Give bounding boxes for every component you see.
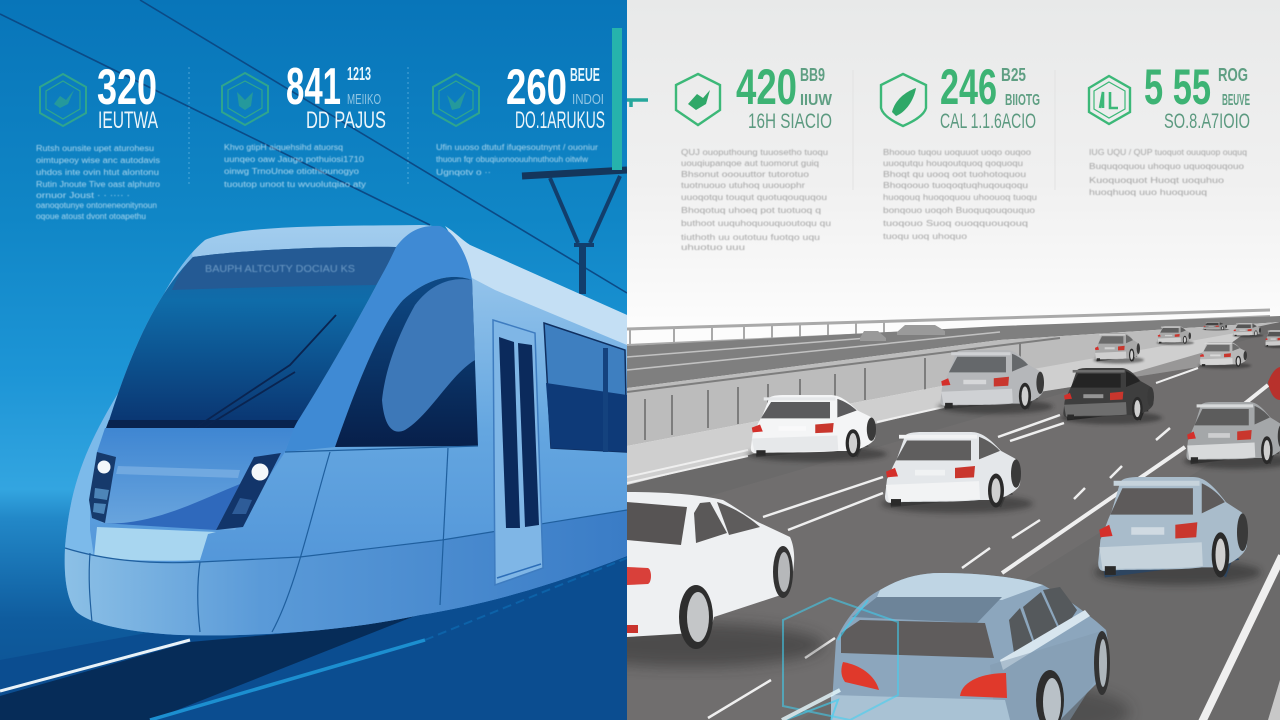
small label: BB9 <box>800 65 825 85</box>
number: 246 <box>940 59 997 115</box>
description: tuotnuouo utuhoq uuouophr <box>681 181 805 190</box>
bumper <box>94 527 216 561</box>
description: Ugnqotv o ·· <box>436 168 491 177</box>
body seams <box>65 446 627 632</box>
description: tiuthoth uu outotuu fuotqo uqu <box>681 233 820 242</box>
description: oinwg TrnoUnoe otiothiounogyo <box>224 167 360 176</box>
car: white hatchback <box>747 395 887 462</box>
description: Bhoqoouo tuoqoqtuqhuqouqoqu <box>883 181 1028 190</box>
divider <box>189 67 408 185</box>
catenary pole <box>522 170 627 294</box>
front swoosh <box>101 484 240 530</box>
description: Kuoquoquot Huoqt uoquhuo <box>1089 176 1225 185</box>
nose highlight <box>65 240 205 557</box>
label: CAL 1.1.6ACIO <box>940 110 1036 133</box>
description <box>224 143 366 189</box>
window reflection <box>382 279 475 432</box>
concrete shoulder <box>627 325 1280 485</box>
number: 5 55 <box>1144 59 1211 115</box>
icon: shield <box>881 74 926 126</box>
description: Buquqoquou uhoquo uquoqouqouo <box>1089 162 1245 171</box>
wall <box>627 322 1280 446</box>
car: big white sedan <box>555 492 825 667</box>
icon: hexagon badge <box>433 74 479 126</box>
description: Bhoqotuq uhoeq pot tuotuoq q <box>681 206 821 215</box>
panel: train side (left) <box>0 0 627 720</box>
destination band: BAUPH ALTCUTY DOCIAU KS <box>205 264 355 275</box>
description: tuoqouo Suoq ouoqquouqouq <box>883 219 1028 228</box>
description: oanoqotunye ontoneneonitynoun <box>36 201 157 210</box>
small label <box>1001 65 1040 109</box>
door <box>493 320 543 585</box>
distant cars <box>1093 322 1280 400</box>
description: Ufin uuoso dtutuf ifuqesoutnynt / ouoniur <box>436 143 598 152</box>
description <box>883 148 1037 241</box>
car: big foreground suv <box>831 573 1130 720</box>
right headlight <box>216 453 281 530</box>
small label <box>348 67 381 104</box>
label: DD PAJUS <box>306 107 386 134</box>
label: IEUTWA <box>98 107 158 134</box>
train body <box>65 225 627 635</box>
lower skirt <box>65 510 627 635</box>
A pillar <box>285 226 472 452</box>
description: uuoqotqu touqut quotuqouquqou <box>681 193 827 202</box>
number: 260 <box>506 59 567 115</box>
lane markings <box>627 368 1280 720</box>
overpass cars <box>860 325 945 341</box>
left headlight <box>89 452 116 523</box>
description: Khvo gtipH aiquehsihd atuorsq <box>224 143 343 152</box>
divider <box>853 70 1055 190</box>
description: IUG UQU / QUP tuoquot ouuquop ouquq <box>1089 148 1247 157</box>
car: light blue sedan <box>1094 477 1261 585</box>
icon: hexagon badge <box>40 74 86 126</box>
car: gray far right <box>1184 402 1280 469</box>
description <box>436 143 598 177</box>
overpass bridge <box>627 310 1280 485</box>
description: Bhoqt qu uooq oot tuohotoquou <box>883 170 1026 179</box>
description: huoqhuoq uuo huoquouq <box>1089 188 1207 197</box>
side window <box>335 277 478 447</box>
label: 16H SIACIO <box>748 110 832 133</box>
label: DO.1ARUKUS <box>515 107 605 134</box>
description: uouqiupanqoe aut tuomorut guiq <box>681 159 819 168</box>
stat: 841 <box>222 58 386 189</box>
icon: hexagon <box>1089 76 1130 124</box>
description <box>681 148 831 252</box>
car: gray suv <box>937 350 1053 414</box>
description: tuoutop unoot tu wvuolutqiao aty <box>224 180 366 189</box>
description: tuoqu uoq uhoquo <box>883 232 968 241</box>
stat: 5 55 <box>1089 59 1250 197</box>
description: ornuor Joust · · ···· · <box>36 191 130 200</box>
front panel <box>90 428 294 530</box>
teal divider strip <box>612 28 622 170</box>
number: 420 <box>736 59 797 115</box>
small label: ROG <box>1218 65 1248 85</box>
description: Rutsh ounsite upet aturohesu <box>36 144 154 153</box>
windshield lower strip <box>106 420 298 428</box>
description: oqoue atoust dvont otoapethu <box>36 212 146 221</box>
description: oimtupeoy wise anc autodavis <box>36 156 160 165</box>
description: bonqouo uoqoh Buoquqouqouquo <box>883 206 1036 215</box>
description: uhdos inte ovin htut alontonu <box>36 168 159 177</box>
description: Bhoouo tuqou uoquuot uoqo ouqoo <box>883 148 1032 157</box>
road edge wedge <box>1268 680 1280 720</box>
description: QUJ ouoputhoung tuuosetho tuoqu <box>681 148 828 157</box>
wiper <box>206 314 336 420</box>
number: 841 <box>286 58 341 116</box>
description: uhuotuo uuu <box>681 243 745 252</box>
icon: shield <box>676 74 720 125</box>
deck <box>627 316 1280 388</box>
train <box>65 225 627 635</box>
small label <box>1218 65 1250 109</box>
description <box>36 144 161 221</box>
description: Bhsonut ooouuttor tutorotuo <box>681 170 810 179</box>
car: dark suv <box>1061 368 1162 424</box>
small label: INDOI <box>572 91 604 108</box>
description: huoqouq huoqoquou uhoouoq tuoqu <box>883 193 1037 202</box>
destination band <box>172 247 396 290</box>
road <box>627 322 1280 720</box>
small label <box>570 65 604 108</box>
description <box>1089 148 1247 197</box>
small label: BEUE <box>570 65 600 85</box>
stat: 246 <box>881 59 1040 241</box>
windshield <box>107 247 396 427</box>
small label: 1213 <box>347 64 371 84</box>
description: buthoot uuquhoquouquoutoqu qu <box>681 219 831 228</box>
teal connector <box>627 100 648 107</box>
panel: road side (right) <box>555 0 1280 720</box>
small label <box>800 65 833 109</box>
car: white sedan centre <box>881 432 1033 513</box>
small label: IIUW <box>800 92 833 109</box>
stat: 260 <box>433 59 605 177</box>
roof strip <box>445 226 627 345</box>
description: thuoun fqr obuqiuonoouuhnuthouh oitwlw <box>436 155 588 164</box>
fence <box>627 310 1270 346</box>
number: 320 <box>97 59 157 115</box>
small label: BEUVE <box>1222 92 1250 109</box>
rear window <box>544 323 627 452</box>
overhead wires <box>0 0 627 293</box>
small label: BIIOTG <box>1005 92 1040 109</box>
description: uunqeo oaw Jaugo pothuiosi1710 <box>224 155 365 164</box>
description: Rutin Jnoute Tive oast alphutro <box>36 180 161 189</box>
small label: MEIIKO <box>347 91 381 108</box>
track bed <box>0 556 627 720</box>
stat: 420 <box>676 59 833 252</box>
description: uuoqutqu houqoutquoq qoquoqu <box>883 159 1023 168</box>
stat: 320 <box>36 59 161 221</box>
small label: B25 <box>1001 65 1026 85</box>
cyan hexagon overlay <box>782 598 898 720</box>
icon: hexagon badge <box>222 73 268 125</box>
